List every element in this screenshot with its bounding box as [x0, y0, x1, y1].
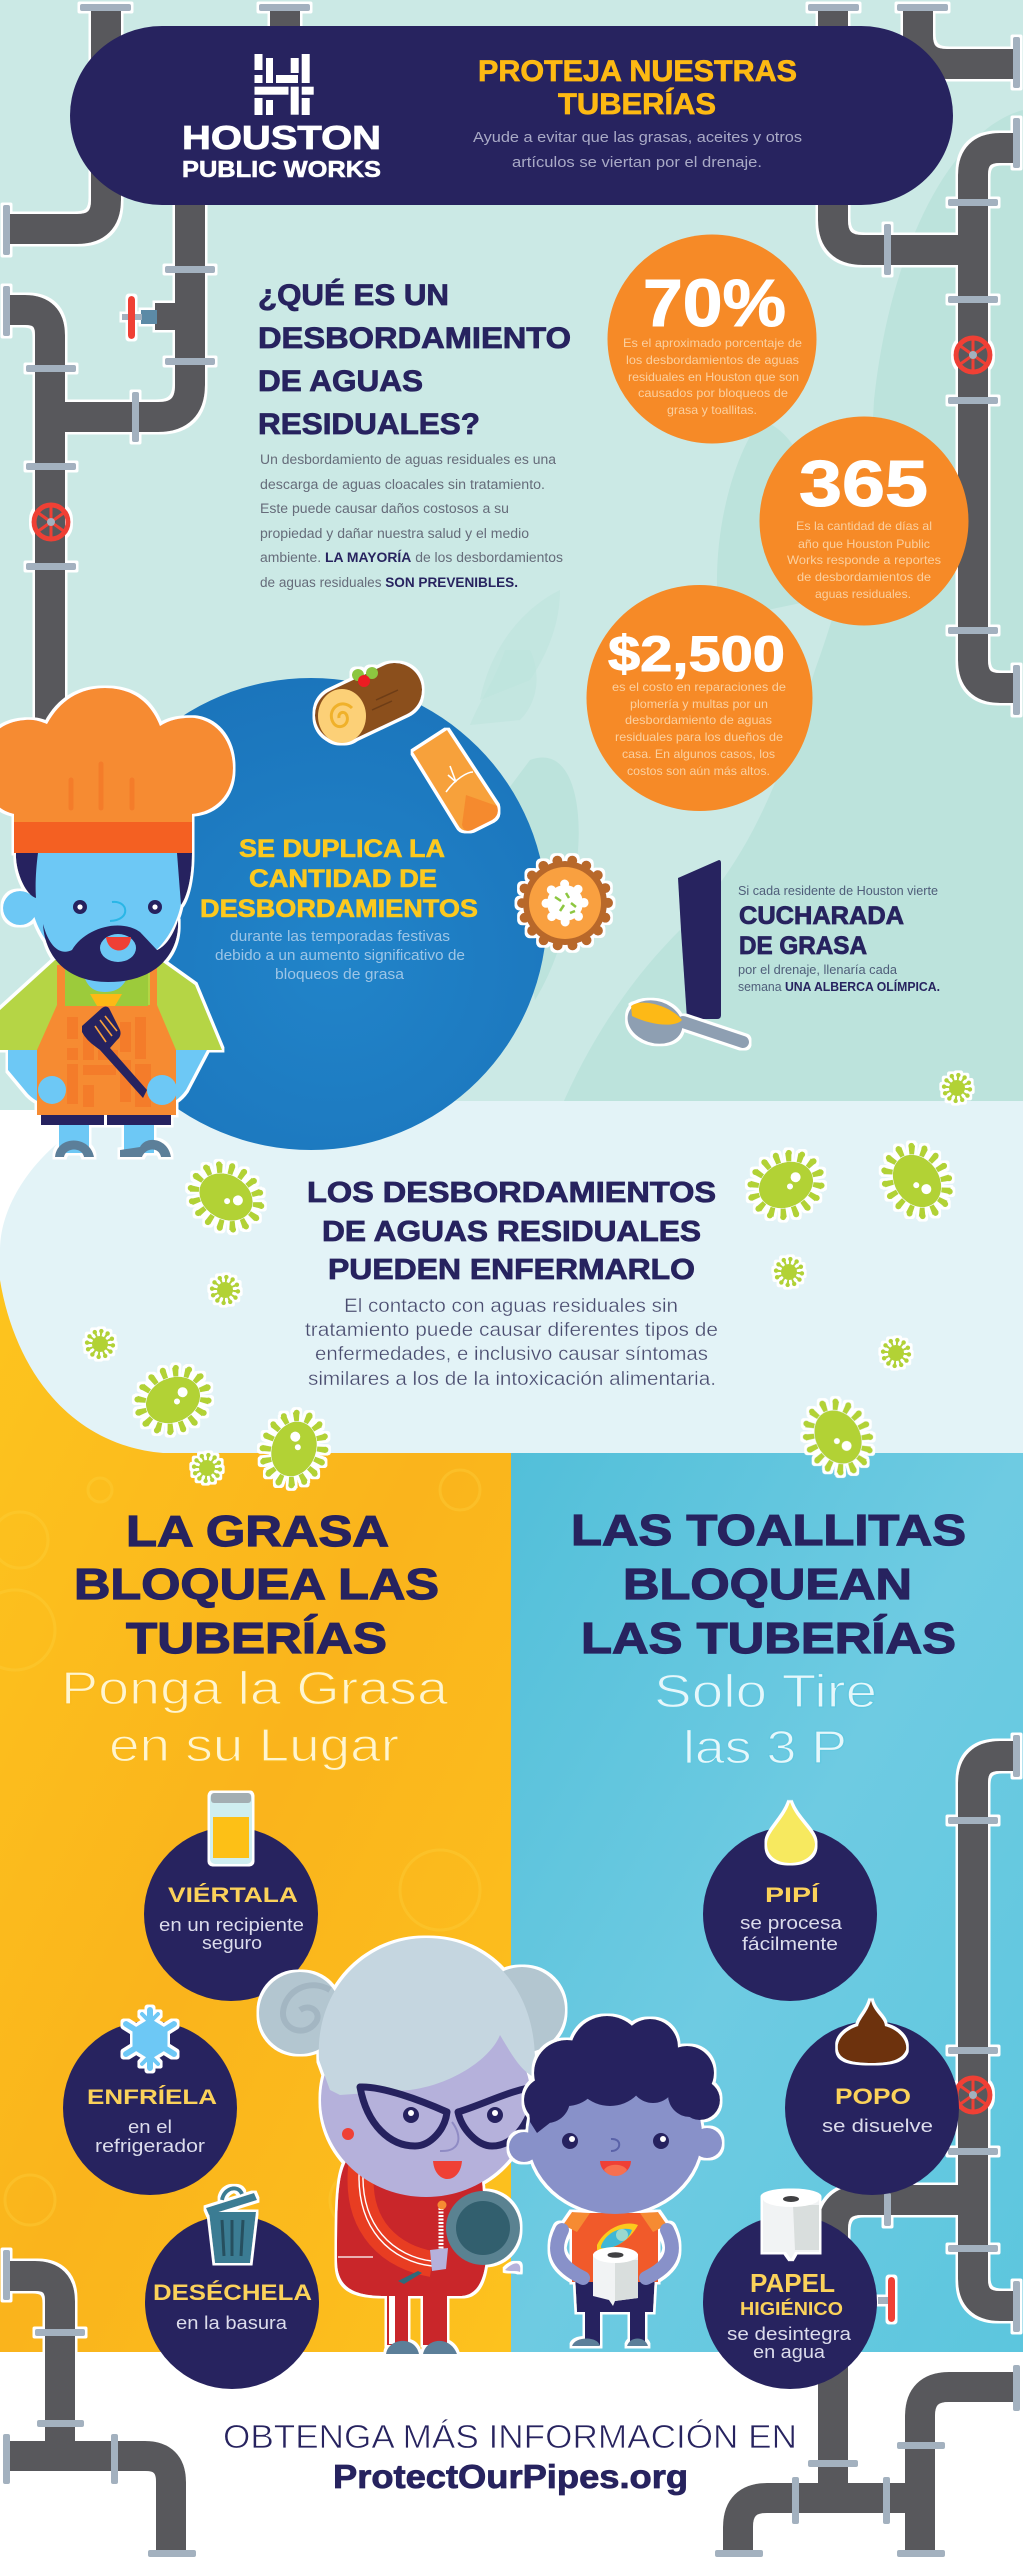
stat: 365 [760, 416, 968, 626]
icon: poop [838, 2000, 906, 2063]
chef shorts [41, 1115, 171, 1125]
heading: wipes block pipes [571, 1506, 966, 1663]
stat: $2,500: es el costo en reparaciones de [612, 680, 786, 694]
kid body [557, 2212, 672, 2346]
heading: grease blocks pipes: TUBERÍAS [126, 1613, 387, 1663]
chef arms [8, 1050, 207, 1104]
heading: grease blocks pipes: LA GRASA [126, 1507, 389, 1556]
heading: wipes block pipes: LAS TUBERÍAS [581, 1613, 956, 1663]
text block: illness description: tratamiento puede causar diferentes tipos de [305, 1320, 718, 1341]
panel: wipes blue background [511, 1453, 1023, 2352]
text block: holiday doubling: durante las temporadas festivas [230, 928, 450, 945]
background swirls [470, 110, 1023, 1110]
text block: illness description: similares a los de la intoxicación alimentaria. [308, 1369, 716, 1390]
stat: 365: Es la cantidad de días al [796, 519, 932, 533]
footer text [223, 2418, 797, 2495]
badge: toilet paper: en agua [753, 2342, 826, 2362]
badge: pee: PIPÍ [765, 1884, 821, 1907]
chef shirt [0, 960, 222, 1050]
grandmother tracksuit [337, 2152, 487, 2296]
stat: 365: aguas residuales. [815, 587, 911, 601]
icon: toilet paper roll [763, 2191, 819, 2259]
badge: toilet paper: HIGIÉNICO [740, 2298, 843, 2319]
stat: 70%: causados por bloqueos de [638, 386, 788, 400]
badge: toilet paper: se desintegra [727, 2324, 852, 2344]
pipes: top left [3, 4, 310, 730]
text block: overflow definition: Un desbordamiento de aguas residuales es una [260, 452, 556, 467]
badge: pour it: VIÉRTALA [168, 1884, 298, 1907]
stat: 365: Works responde a reportes [787, 553, 941, 567]
heading: grease blocks pipes: BLOQUEA LAS [74, 1560, 439, 1609]
badge: throw it away: en la basura [176, 2313, 288, 2333]
text block: holiday doubling: SE DUPLICA LA [239, 835, 445, 863]
badge: cool it: en el [128, 2117, 172, 2137]
text block: illness description: enfermedades, e inclusivo causar síntomas [315, 1344, 708, 1365]
stat: $2,500 [586, 585, 812, 811]
header title: PROTEJA NUESTRAS [478, 55, 797, 88]
character: kid [509, 2016, 722, 2346]
icon: trash can [206, 2188, 257, 2263]
text block: holiday doubling [200, 835, 478, 983]
text block: spoon of grease: Si cada residente de Houston vierte [738, 883, 938, 898]
stat: 70%: grasa y toallitas. [667, 403, 757, 417]
stat: $2,500: desbordamiento de aguas [625, 713, 772, 727]
icon: pie [522, 860, 608, 946]
footer text: ProtectOurPipes.org [333, 2458, 688, 2495]
grandmother legs [386, 2266, 457, 2354]
subheading: only flush the 3 Ps: Solo Tire [654, 1665, 877, 1717]
chef apron [37, 965, 176, 1115]
grandmother frying pan [430, 2191, 520, 2272]
badge: pour it: seguro [202, 1933, 262, 1953]
chef spatula [82, 1006, 147, 1098]
panel: holiday blue circle [75, 678, 547, 1150]
subheading: put grease in its place [61, 1662, 448, 1771]
text block: spoon of grease: semana UNA ALBERCA OLÍMPICA. [738, 979, 940, 994]
badge: cool it: ENFRÍELA [87, 2086, 217, 2109]
icon: jar [210, 1793, 252, 1864]
text block: spoon of grease: CUCHARADA [739, 902, 904, 930]
subheading: only flush the 3 Ps: las 3 P [683, 1721, 847, 1773]
icon: yule log [318, 667, 398, 743]
badge: pour it: en un recipiente [159, 1915, 304, 1935]
chef legs and shoes [55, 1125, 171, 1157]
subheading: put grease in its place: en su Lugar [109, 1719, 399, 1771]
kid toilet paper [593, 2247, 638, 2306]
grease bubbles texture [0, 1470, 480, 2230]
heading: wipes block pipes: LAS TOALLITAS [571, 1506, 966, 1555]
text block: overflow definition: propiedad y dañar nuestra salud y el medio [260, 526, 529, 541]
text block: holiday doubling: DESBORDAMIENTOS [200, 895, 478, 923]
stat: 70%: Es el aproximado porcentaje de [623, 336, 802, 350]
logo: Houston Public Works: PUBLIC WORKS [182, 156, 381, 182]
text block: overflow definition: Este puede causar daños costosos a su [260, 501, 509, 516]
heading: what is an overflow: RESIDUALES? [258, 408, 480, 441]
panel: grease yellow background [0, 1280, 511, 2352]
badge: poop: se disuelve [822, 2116, 933, 2136]
icon: snowflake [126, 2010, 174, 2068]
badge: pee [703, 1802, 877, 2001]
badge: toilet paper [703, 2191, 877, 2389]
logo: Houston Public Works: HOUSTON [182, 119, 381, 156]
character: grandmother [259, 1938, 565, 2354]
text block: holiday doubling: CANTIDAD DE [249, 865, 437, 893]
icon: measuring spoon [622, 993, 743, 1051]
badge: toilet paper: PAPEL [750, 2268, 835, 2298]
text block: illness description [305, 1296, 718, 1390]
text block: spoon of grease: por el drenaje, llenaría cada [738, 962, 898, 977]
stat: $2,500: costos son aún más altos. [627, 764, 770, 778]
heading: overflows can make you sick: DE AGUAS RESIDUALES [322, 1216, 701, 1248]
text block: spoon of grease [738, 883, 940, 994]
stat: $2,500: $2,500 [608, 626, 785, 682]
icon: yellow drop [767, 1802, 815, 1863]
chef head [3, 853, 192, 982]
pipes: lower left [3, 2250, 196, 2557]
badge: poop: POPO [835, 2084, 911, 2109]
logo: Houston Public Works [182, 54, 381, 182]
header banner [70, 26, 953, 205]
heading: overflows can make you sick: PUEDEN ENFERMARLO [328, 1254, 695, 1286]
kid head [509, 2016, 722, 2214]
text block: overflow definition: de aguas residuales SON PREVENIBLES. [260, 575, 518, 590]
icon: burrito [413, 730, 498, 831]
text block: overflow definition: ambiente. LA MAYORÍA de los desbordamientos [260, 550, 563, 565]
badge: throw it away [145, 2188, 319, 2389]
text block: illness description: El contacto con aguas residuales sin [344, 1296, 678, 1317]
heading: what is an overflow: DESBORDAMIENTO [258, 322, 571, 355]
header subtitle: artículos se viertan por el drenaje. [512, 154, 762, 171]
subheading: only flush the 3 Ps [654, 1665, 877, 1773]
badge: throw it away: DESÉCHELA [153, 2280, 312, 2305]
header title: TUBERÍAS [558, 87, 716, 121]
germs [87, 1075, 970, 1494]
text block: holiday doubling: debido a un aumento significativo de [215, 947, 465, 964]
icon: jug of grease [678, 860, 721, 1019]
subheading: put grease in its place: Ponga la Grasa [61, 1662, 448, 1714]
badge: pee: se procesa [740, 1913, 843, 1933]
heading: overflows can make you sick: LOS DESBORDAMIENTOS [307, 1177, 716, 1209]
text block: overflow definition [260, 452, 563, 590]
stat: 365: año que Houston Public [798, 537, 930, 551]
stat: 70%: 70% [643, 266, 786, 341]
heading: grease blocks pipes [74, 1507, 439, 1663]
heading: wipes block pipes: BLOQUEAN [623, 1560, 912, 1609]
stat: 70% [608, 234, 816, 444]
pipes: top right [808, 4, 1020, 715]
background: mint [0, 0, 1023, 1110]
heading: overflows can make you sick [307, 1177, 716, 1286]
text block: holiday doubling: bloqueos de grasa [275, 966, 405, 983]
stat: $2,500: plomería y multas por un [630, 697, 768, 711]
text block: spoon of grease: DE GRASA [739, 932, 867, 960]
header subtitle [473, 129, 802, 171]
stat: $2,500: residuales para los dueños de [615, 730, 783, 744]
badge: pee: fácilmente [742, 1934, 838, 1954]
stat: 70%: los desbordamientos de aguas [626, 353, 799, 367]
heading: what is an overflow: DE AGUAS [258, 365, 423, 398]
chef hat [0, 688, 233, 853]
stat: 365: de desbordamientos de [797, 570, 931, 584]
character: chef [0, 688, 233, 1157]
grandmother head [319, 1938, 537, 2197]
grandmother buns [259, 1967, 565, 2054]
badge: cool it: refrigerador [95, 2136, 205, 2156]
stat: 70%: residuales en Houston que son [628, 370, 799, 384]
stat: 365: 365 [799, 447, 928, 520]
badge: cool it [63, 2010, 237, 2195]
footer white area [0, 2352, 1023, 2560]
header subtitle: Ayude a evitar que las grasas, aceites y otros [473, 129, 802, 146]
text block: overflow definition: descarga de aguas cloacales sin tratamiento. [260, 477, 545, 492]
badge: poop [785, 2000, 959, 2195]
header title [478, 55, 797, 121]
badge: pour it [144, 1793, 318, 2001]
heading: what is an overflow [258, 278, 571, 441]
heading: what is an overflow: ¿QUÉ ES UN [258, 278, 449, 312]
stat: $2,500: casa. En algunos casos, los [622, 747, 775, 761]
pipes: lower right [715, 1735, 1020, 2557]
chef hands [38, 1075, 177, 1105]
footer text: OBTENGA MÁS INFORMACIÓN EN [223, 2418, 797, 2455]
panel: light blue illness section [0, 1101, 1023, 1460]
